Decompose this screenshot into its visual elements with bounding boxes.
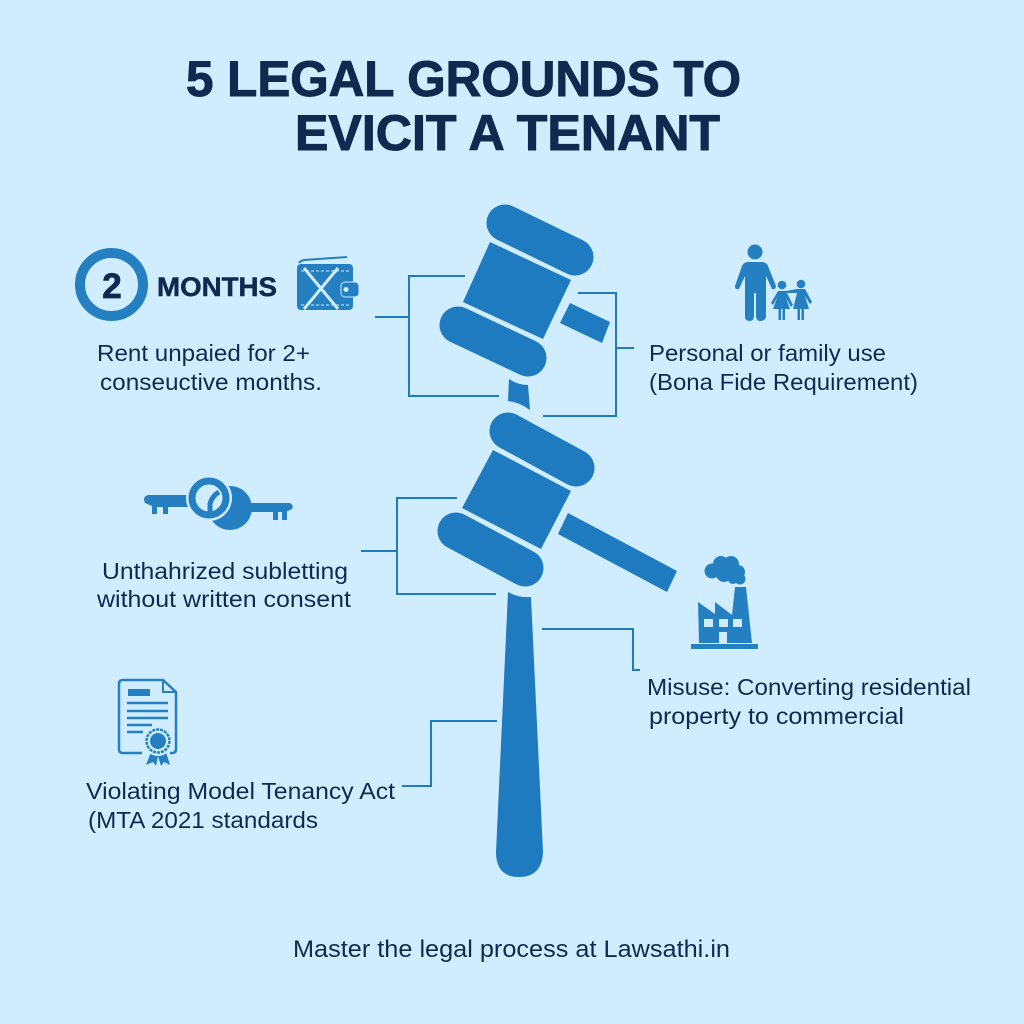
ground 5: misuse [647,556,971,729]
description: Personal or family use [649,340,886,366]
footer: Master the legal process at Lawsathi.in [293,936,730,963]
description: property to commercial [649,703,904,729]
description: (MTA 2021 standards [88,807,318,833]
description: without written consent [96,586,352,612]
icon: factory [691,556,758,649]
icon: number 2 badge [80,253,143,316]
description [96,558,352,612]
description: Violating Model Tenancy Act [86,778,396,804]
ground 1: unpaid rent [80,253,359,395]
description [97,340,322,395]
ground 2: family use [649,244,918,395]
gavel illustration [456,223,677,877]
description: Rent unpaied for 2+ [97,340,310,366]
description [86,778,396,833]
description [647,674,971,729]
icon: family [735,244,812,321]
description: Misuse: Converting residential [647,674,971,700]
lower gavel head [456,431,677,592]
icon: certificate document [119,680,176,766]
connector lines [361,276,640,786]
description [649,340,918,395]
ground 4: model tenancy act [86,680,396,833]
icon: number 2 badge: 2 [102,267,122,306]
title: EVICIT A TENANT [295,105,720,161]
title [186,51,741,161]
broken handle piece [508,379,530,410]
icon: crossed wallet [297,257,359,310]
description: conseuctive months. [100,369,322,395]
upper gavel head [458,223,610,358]
months label: MONTHS [157,272,277,302]
title: 5 LEGAL GROUNDS TO [186,51,741,107]
description: Unthahrized subletting [102,558,348,584]
main handle [496,592,543,877]
ground 3: subletting [96,475,352,612]
icon: two keys [144,475,293,530]
description: (Bona Fide Requirement) [649,369,918,395]
